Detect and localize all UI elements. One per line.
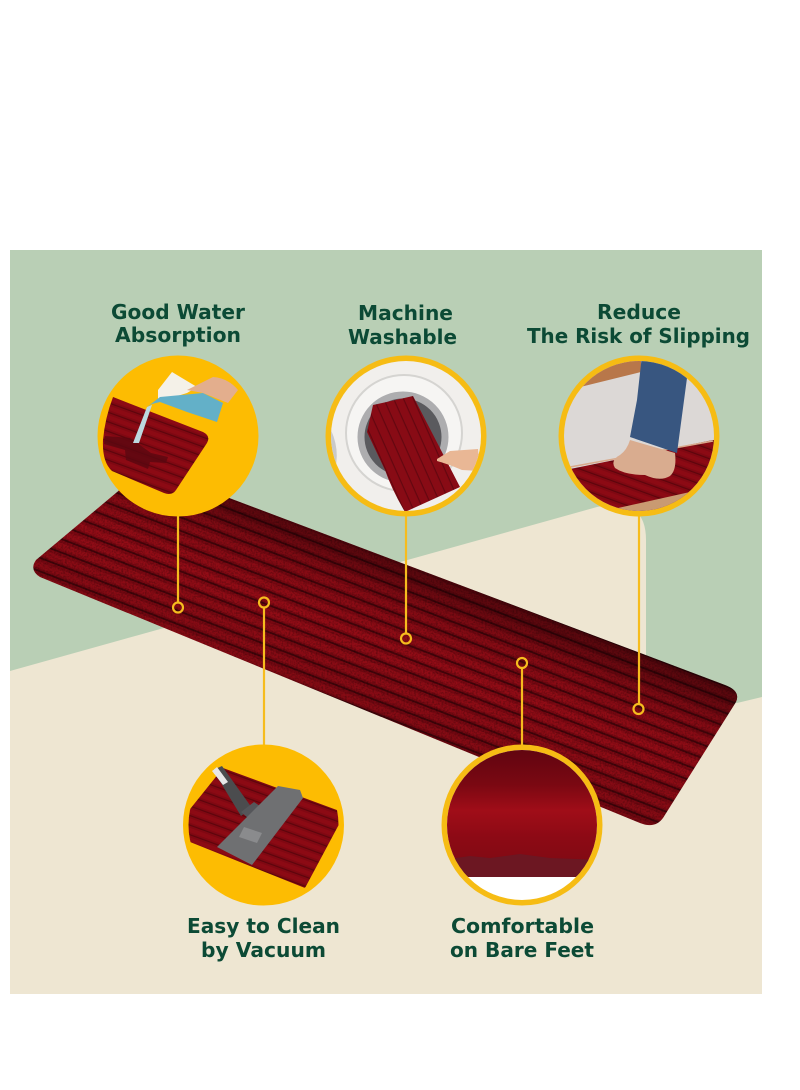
- callout line: vacuum: [259, 598, 269, 746]
- label: comfortable on bare feet: on Bare Feet: [450, 938, 594, 962]
- wood stair edge: [583, 361, 641, 386]
- label: machine washable: [348, 301, 457, 349]
- label: easy to clean by vacuum: [187, 914, 340, 962]
- circle: machine washable: [325, 355, 487, 517]
- lower wood edge: [618, 492, 688, 511]
- bare foot: [613, 440, 675, 479]
- circle: easy to clean by vacuum: [170, 744, 345, 906]
- label: reduce the risk of slipping: [527, 300, 750, 348]
- hand: [187, 377, 238, 403]
- circle: reduce risk of slipping: [558, 355, 720, 520]
- background panel: [10, 250, 762, 994]
- label: good water absorption: [111, 300, 246, 347]
- callout line: reduce slipping: [634, 514, 644, 714]
- water stain: [104, 436, 168, 469]
- label: machine washable: Washable: [348, 325, 457, 349]
- washer door: [346, 375, 462, 491]
- label: reduce the risk of slipping: Reduce: [597, 300, 681, 324]
- label: easy to clean by vacuum: by Vacuum: [201, 938, 326, 962]
- label: machine washable: Machine: [358, 301, 453, 325]
- label: good water absorption: Good Water: [111, 300, 246, 324]
- label: comfortable on bare feet: Comfortable: [451, 914, 594, 938]
- infographic canvas: [10, 250, 762, 994]
- label: good water absorption: Absorption: [115, 323, 241, 347]
- frayed edge: [454, 854, 588, 877]
- mat coming out of drum: [367, 396, 460, 512]
- callout line: comfortable: [517, 658, 527, 746]
- red ribbed mat: [33, 490, 738, 826]
- label: reduce the risk of slipping: The Risk of Slipping: [527, 324, 750, 348]
- label: easy to clean by vacuum: Easy to Clean: [187, 914, 340, 938]
- mat swatch: [103, 397, 208, 494]
- mat strip: [188, 768, 338, 888]
- label: comfortable on bare feet: [450, 914, 594, 962]
- circle: comfortable on bare feet: [442, 744, 604, 907]
- glass and pouring water: [133, 372, 223, 443]
- hand: [437, 449, 480, 471]
- circle: water absorption: [98, 356, 258, 516]
- red stair mat: [572, 440, 714, 511]
- callout line: water absorption: [173, 514, 183, 612]
- callout line: machine washable: [401, 514, 411, 644]
- vacuum cleaner: [212, 766, 303, 865]
- jeans: [630, 361, 687, 453]
